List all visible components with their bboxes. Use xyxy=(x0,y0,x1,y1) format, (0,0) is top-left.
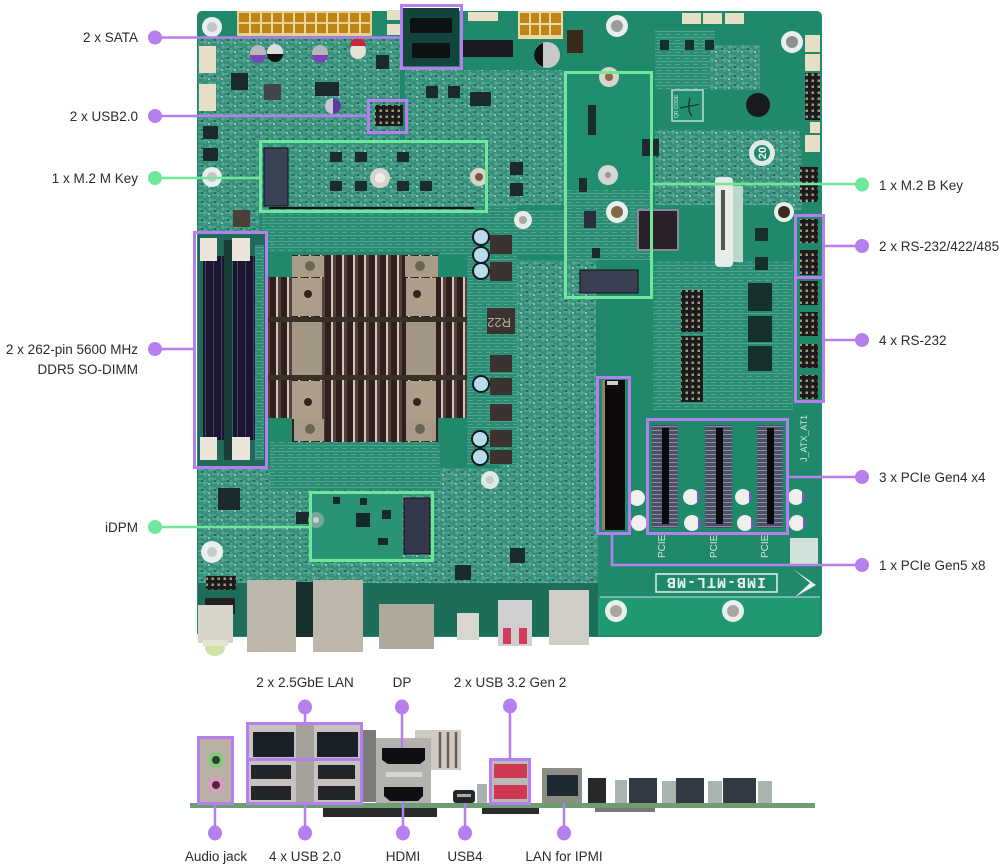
mounting holes xyxy=(201,15,803,622)
callout: 1 x M.2 M Key xyxy=(52,142,486,212)
callout: 4 x USB 2.0 xyxy=(248,760,362,864)
callout: Audio jack xyxy=(185,738,247,864)
callout: 2 x RS-232/422/485 xyxy=(796,216,999,278)
IPMI LAN port xyxy=(549,590,589,645)
silkscreen PCIE labels: PCIE xyxy=(657,534,668,558)
LAN and USB stack 1 xyxy=(247,580,296,652)
callout: USB4 xyxy=(447,803,483,864)
callouts: board xyxy=(6,6,999,573)
iDPM chips xyxy=(333,497,391,545)
LAN and USB stack xyxy=(248,724,376,803)
USB4 port xyxy=(453,784,487,803)
callout: LAN for IPMI: LAN for IPMI xyxy=(525,849,603,864)
PCIe side capacitors xyxy=(629,489,806,531)
PCIe Gen4 x4 slots xyxy=(652,425,783,528)
callout: DP: DP xyxy=(393,675,411,690)
audio jack ports xyxy=(199,738,233,803)
SATA connectors xyxy=(403,8,459,66)
buzzer xyxy=(746,93,770,117)
callout: LAN for IPMI xyxy=(525,803,603,864)
display port stack xyxy=(379,604,434,649)
callout: 2 x USB 3.2 Gen 2 xyxy=(454,675,566,804)
USB 3.2 red ports xyxy=(491,760,530,803)
LAN and USB stack 2 xyxy=(313,580,363,652)
USB2.0 header xyxy=(375,105,403,126)
board substrate xyxy=(197,11,822,637)
model name plate: IMB-MTL-MB xyxy=(666,573,766,590)
callout: 1 x M.2 B Key: 1 x M.2 B Key xyxy=(879,178,963,193)
panel: motherboard top view xyxy=(197,8,822,656)
silkscreen PCIE labels: J_ATX_AT1 xyxy=(799,415,809,462)
M.2 M Key socket xyxy=(264,148,288,206)
callout: HDMI xyxy=(386,801,420,864)
callout: 2 x 262-pin DDR5 SO-DIMM: DDR5 SO-DIMM xyxy=(38,362,138,377)
callout: 2 x SATA xyxy=(83,6,462,68)
callout: 1 x PCIe Gen5 x8: 1 x PCIe Gen5 x8 xyxy=(879,558,986,573)
4-pin header xyxy=(206,576,236,590)
yellow switch xyxy=(567,30,583,53)
blue capacitors xyxy=(472,229,489,465)
callout: 2 x 2.5GbE LAN xyxy=(248,675,362,760)
trace areas xyxy=(198,30,802,583)
IPMI LAN port xyxy=(542,768,582,803)
square ICs and inductors xyxy=(203,55,525,580)
logo mark xyxy=(790,538,818,597)
M.2 B Key small chips xyxy=(579,105,659,258)
silkscreen PCIE labels: PCIE xyxy=(760,534,771,558)
callout: 1 x M.2 B Key xyxy=(566,72,963,298)
PCB edge xyxy=(190,803,815,808)
callout: 2 x RS-232/422/485: 2 x RS-232/422/485 xyxy=(879,239,999,254)
callout: iDPM xyxy=(105,492,432,560)
USB 3.2 stack xyxy=(498,600,532,646)
QR code box: QR CODE xyxy=(674,94,680,118)
callout: USB4: USB4 xyxy=(447,849,483,864)
dark gap xyxy=(296,582,313,637)
side-view components xyxy=(588,778,772,803)
power inductors xyxy=(487,235,515,464)
callout: 2 x 262-pin DDR5 SO-DIMM: 2 x 262-pin 5600 MHz xyxy=(6,342,138,357)
callout: 1 x M.2 M Key: 1 x M.2 M Key xyxy=(52,171,138,186)
callout: iDPM: iDPM xyxy=(105,520,138,535)
callout: HDMI: HDMI xyxy=(386,849,420,864)
callout: 3 x PCIe Gen4 x4: 3 x PCIe Gen4 x4 xyxy=(879,470,986,485)
large QFP chip xyxy=(638,210,678,250)
audio jack xyxy=(198,605,233,656)
rear ports seen from top xyxy=(198,576,589,656)
dark band behind rear ports xyxy=(198,583,598,636)
RS-232 headers xyxy=(800,219,818,399)
heatsink behind ports xyxy=(415,730,461,770)
callout: 2 x 262-pin DDR5 SO-DIMM xyxy=(6,232,266,468)
callout: 2 x USB 3.2 Gen 2: 2 x USB 3.2 Gen 2 xyxy=(454,675,566,690)
callout: 4 x RS-232: 4 x RS-232 xyxy=(879,333,947,348)
power inductors: R22 xyxy=(487,315,511,330)
PCIe Gen5 x8 slot xyxy=(602,380,625,530)
M.2 B Key socket xyxy=(580,270,638,293)
silkscreen PCIE labels: PCIE xyxy=(709,534,720,558)
callout: DP xyxy=(393,675,411,748)
bright lower board strip xyxy=(598,597,820,635)
under-board components xyxy=(323,808,655,817)
callout: Audio jack: Audio jack xyxy=(185,849,247,864)
callout: 3 x PCIe Gen4 x4 xyxy=(648,420,986,534)
smooth area under M.2 B Key xyxy=(567,74,651,189)
callout: 2 x SATA: 2 x SATA xyxy=(83,30,138,45)
8-pin power connector xyxy=(518,11,563,39)
callouts: rear I/O xyxy=(185,675,603,864)
callout: 2 x 2.5GbE LAN: 2 x 2.5GbE LAN xyxy=(256,675,354,690)
USB4 port xyxy=(457,613,479,640)
barcode label xyxy=(715,177,743,267)
panel: rear I/O side view xyxy=(190,724,815,817)
small connectors xyxy=(199,10,820,152)
model name plate xyxy=(600,573,820,597)
other ICs xyxy=(660,40,772,371)
ATX power connector xyxy=(237,11,372,36)
heatsink xyxy=(258,255,467,442)
badge: 20 xyxy=(757,147,769,159)
M.2 M Key small chips xyxy=(269,152,474,209)
DDR5 SO-DIMM slots xyxy=(198,234,266,466)
iDPM socket xyxy=(404,498,430,554)
callout: 2 x USB2.0: 2 x USB2.0 xyxy=(70,109,138,124)
dark pin headers xyxy=(205,40,820,614)
callout: 4 x RS-232 xyxy=(796,278,947,402)
callout: 4 x USB 2.0: 4 x USB 2.0 xyxy=(269,849,341,864)
callout: 1 x PCIe Gen5 x8 xyxy=(598,378,986,573)
electrolytic capacitors xyxy=(250,38,560,114)
badge xyxy=(749,140,775,166)
DP and HDMI stack xyxy=(376,738,431,803)
QR code box xyxy=(672,90,703,121)
silkscreen PCIE labels xyxy=(657,415,809,558)
callout: 2 x USB2.0 xyxy=(70,100,406,132)
